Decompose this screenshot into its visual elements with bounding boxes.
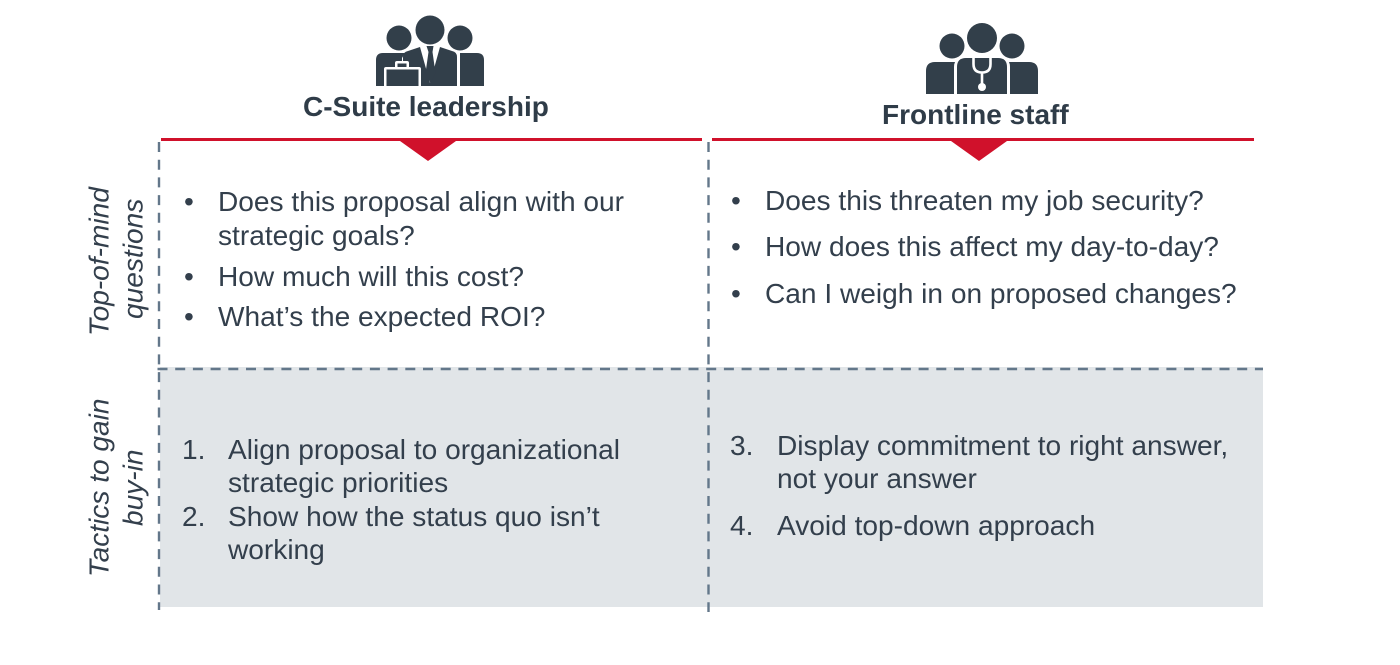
text block: frontline tactics: Display commitment to right answer, <box>777 430 1228 461</box>
text block: c-suite questions: How much will this cost? <box>218 261 524 292</box>
text block: frontline questions: How does this affect my day-to-day? <box>765 231 1219 262</box>
text block: c-suite questions: • <box>184 186 194 217</box>
red header rule: c-suite <box>161 138 702 161</box>
text block: c-suite questions: • <box>184 301 194 332</box>
text block: frontline questions: • <box>731 185 741 216</box>
text block: c-suite questions: strategic goals? <box>218 220 415 251</box>
text block: frontline questions <box>731 185 1237 309</box>
text block: c-suite questions: What’s the expected ROI? <box>218 301 545 332</box>
text block: c-suite tactics <box>182 434 620 565</box>
row label: tactics to gain buy-in <box>84 398 148 577</box>
row label: top-of-mind questions <box>84 186 148 336</box>
text block: c-suite questions: Does this proposal align with our <box>218 186 624 217</box>
text block: frontline tactics: 4. <box>730 510 753 541</box>
text block: c-suite tactics: working <box>227 534 325 565</box>
row label: top-of-mind questions: Top-of-mind <box>84 186 114 336</box>
text block: c-suite questions <box>184 186 624 332</box>
row label: top-of-mind questions: questions <box>118 199 148 319</box>
text block: frontline questions: • <box>731 278 741 309</box>
text block: c-suite tactics: Show how the status quo isn’t <box>228 501 600 532</box>
text block: c-suite questions: • <box>184 261 194 292</box>
text block: c-suite tactics: Align proposal to organizational <box>228 434 620 465</box>
text block: c-suite tactics: strategic priorities <box>228 467 448 498</box>
icon: c-suite leadership group <box>376 16 484 86</box>
text block: frontline tactics: Avoid top-down approach <box>777 510 1095 541</box>
text block: frontline questions: Can I weigh in on proposed changes? <box>765 278 1237 309</box>
icon: frontline staff group <box>926 23 1038 94</box>
heading: C-Suite leadership: C-Suite leadership <box>303 91 549 122</box>
text block: frontline questions: • <box>731 231 741 262</box>
text block: frontline tactics: 3. <box>730 430 753 461</box>
row label: tactics to gain buy-in: Tactics to gain <box>84 398 114 577</box>
text block: frontline questions: Does this threaten my job security? <box>765 185 1204 216</box>
text block: c-suite tactics: 2. <box>182 501 205 532</box>
text block: c-suite tactics: 1. <box>182 434 205 465</box>
dashed grid lines <box>158 142 1263 612</box>
text block: frontline tactics: not your answer <box>777 463 977 494</box>
heading: Frontline staff: Frontline staff <box>882 99 1069 130</box>
row label: tactics to gain buy-in: buy-in <box>118 449 148 526</box>
text block: frontline tactics <box>730 430 1228 541</box>
panel: tactics background <box>160 367 1263 607</box>
red header rule: frontline <box>712 138 1254 161</box>
